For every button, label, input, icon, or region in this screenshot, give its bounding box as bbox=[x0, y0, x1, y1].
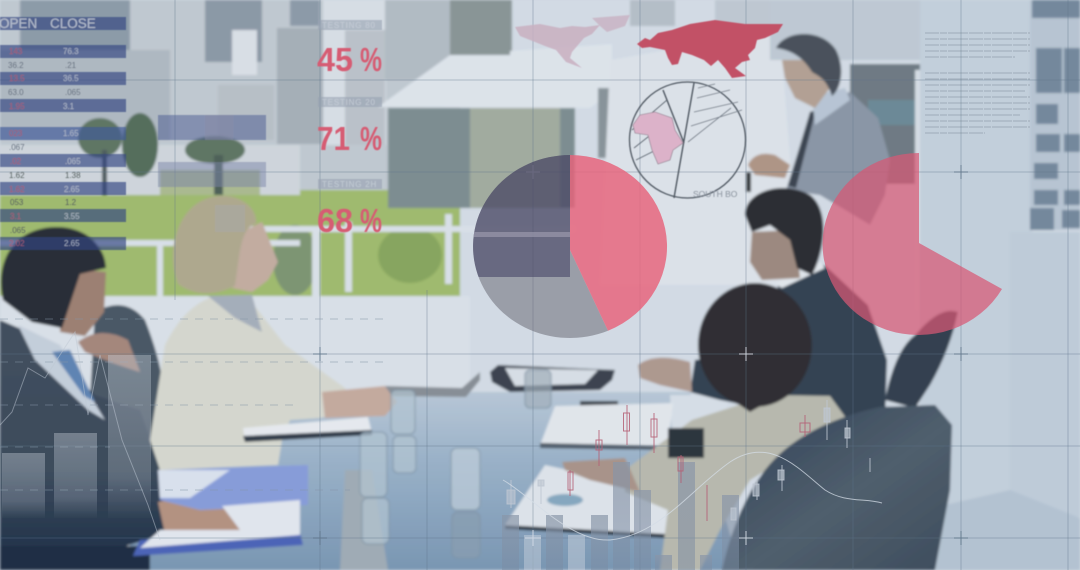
right wall and building bbox=[770, 0, 1080, 517]
table values: 1.38 bbox=[65, 171, 81, 180]
laptop bbox=[385, 372, 480, 397]
table values: 1.2 bbox=[65, 198, 77, 207]
table values: 1.62 bbox=[9, 171, 25, 180]
table values: 1.95 bbox=[9, 102, 25, 111]
table values: 3.55 bbox=[64, 212, 80, 221]
notebooks on table bbox=[505, 403, 673, 538]
table values: 2.02 bbox=[9, 239, 25, 248]
glass pavilion bbox=[378, 0, 616, 208]
table values: .065 bbox=[10, 226, 26, 235]
building windows bbox=[1030, 0, 1080, 230]
africa shape bbox=[633, 112, 683, 164]
sky and city skyline bbox=[0, 0, 915, 190]
stat readouts bbox=[317, 20, 382, 239]
table of open and close values bbox=[0, 16, 266, 250]
table values: 36.5 bbox=[63, 74, 79, 83]
table values: .21 bbox=[65, 61, 77, 70]
stat 45 percent: 45 bbox=[317, 41, 353, 78]
table values: .065 bbox=[65, 88, 81, 97]
stat 71 percent: % bbox=[360, 120, 382, 157]
stat 71 percent: 71 bbox=[317, 120, 350, 157]
map: greenland bbox=[592, 15, 630, 32]
floor right bbox=[925, 490, 1080, 570]
map: eurasia bbox=[637, 20, 783, 78]
stat 71 percent: TESTING 20 bbox=[322, 98, 376, 107]
woman from behind bbox=[562, 283, 846, 570]
map: north america bbox=[515, 24, 600, 68]
pie slice: grey bbox=[473, 155, 608, 338]
candlestick chart bbox=[507, 400, 870, 521]
table values: 143 bbox=[9, 47, 23, 56]
table values: 3.1 bbox=[63, 102, 75, 111]
right pie chart bbox=[823, 153, 1002, 335]
world map bbox=[515, 15, 783, 78]
table headers: OPEN bbox=[0, 16, 37, 31]
standing man bbox=[638, 188, 887, 420]
floating tint blocks bbox=[158, 115, 266, 232]
whiteboard bbox=[600, 30, 800, 285]
table values: 053 bbox=[10, 198, 24, 207]
left pie chart bbox=[470, 150, 667, 338]
pie slice: dark upper reflection bbox=[470, 150, 570, 277]
table values: 3.1 bbox=[10, 212, 22, 221]
left man bbox=[0, 227, 255, 570]
window frames bbox=[0, 214, 575, 396]
table values: 36.2 bbox=[8, 61, 24, 70]
table values: 2.65 bbox=[64, 185, 80, 194]
left line chart bbox=[0, 332, 160, 540]
crosshair markers bbox=[313, 165, 968, 546]
stat 68 percent: 68 bbox=[317, 202, 353, 239]
bottom wave line bbox=[503, 452, 882, 540]
table values: .067 bbox=[9, 143, 25, 152]
table values: 023 bbox=[9, 129, 23, 138]
binder and notepad bbox=[133, 465, 308, 556]
table bbox=[120, 392, 740, 570]
blonde woman bbox=[150, 196, 397, 470]
table values bbox=[8, 47, 81, 248]
stat 45 percent: TESTING 80 bbox=[322, 21, 376, 30]
table values: 1.62 bbox=[9, 185, 25, 194]
table values: 1.65 bbox=[63, 129, 79, 138]
back chair bbox=[885, 311, 958, 408]
table headers: CLOSE bbox=[50, 16, 96, 31]
table values: .065 bbox=[65, 157, 81, 166]
stat 68 percent bbox=[317, 179, 382, 239]
bottom bar chart bbox=[502, 462, 739, 570]
stat 68 percent: % bbox=[360, 202, 382, 239]
presenter bbox=[746, 34, 890, 225]
tablet bbox=[490, 365, 615, 392]
table row bars bbox=[0, 17, 126, 250]
whiteboard pie sketch bbox=[630, 82, 746, 199]
stat 71 percent bbox=[317, 97, 382, 157]
pie slice: pink bbox=[570, 155, 667, 331]
table values: 63.0 bbox=[8, 88, 24, 97]
stat 68 percent: TESTING 2H bbox=[322, 180, 377, 189]
table values: 2.65 bbox=[64, 239, 80, 248]
grey candles bbox=[507, 400, 870, 520]
table glasses bbox=[360, 370, 618, 558]
table values: 76.3 bbox=[63, 47, 79, 56]
left bar chart bbox=[2, 355, 151, 518]
foreground chair bbox=[722, 405, 952, 570]
small printed text block bbox=[925, 33, 1030, 133]
table values: 13.5 bbox=[9, 74, 25, 83]
stat 45 percent bbox=[317, 20, 382, 78]
table values: .02 bbox=[10, 157, 22, 166]
dashed guide lines bbox=[0, 319, 385, 490]
table headers bbox=[0, 16, 96, 31]
chair behind left man bbox=[90, 305, 165, 440]
stat 45 percent: % bbox=[360, 41, 382, 78]
garden greenery bbox=[0, 113, 460, 310]
whiteboard label: SOUTH BO bbox=[693, 189, 738, 199]
